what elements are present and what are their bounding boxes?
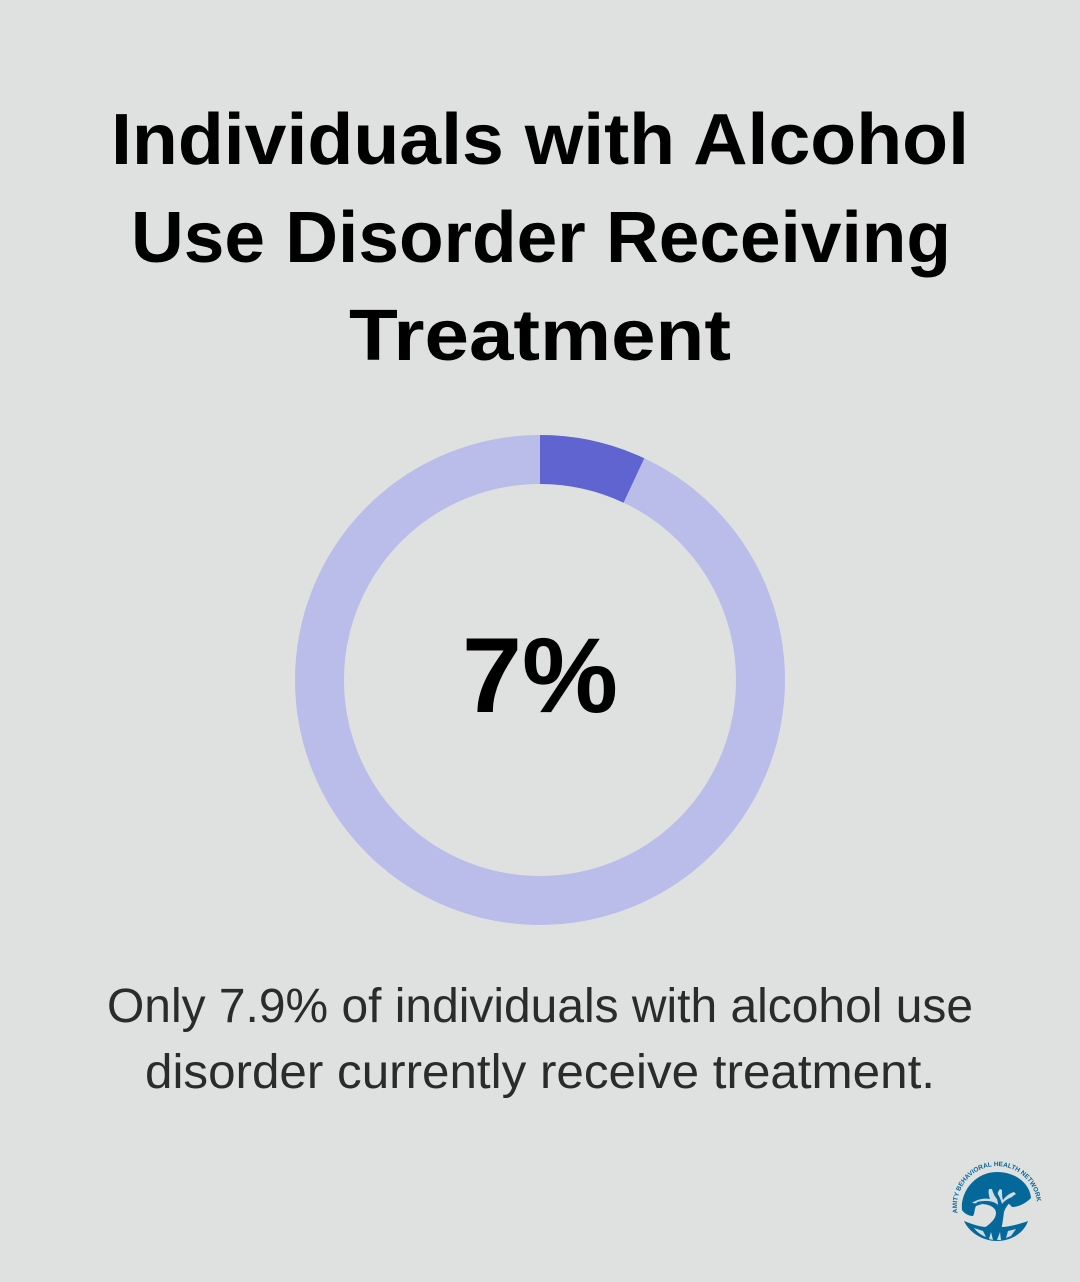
title: Individuals with Alcohol bbox=[111, 100, 969, 180]
title bbox=[111, 100, 969, 376]
donut highlighted segment bbox=[540, 435, 644, 503]
donut chart: 7 percent bbox=[320, 435, 760, 900]
title: Use Disorder Receiving bbox=[131, 198, 951, 278]
donut value: 7% bbox=[462, 615, 618, 735]
description text bbox=[107, 980, 973, 1099]
logo: Amity Behavioral Health Network bbox=[952, 1162, 1042, 1241]
logo tree trunk bbox=[976, 1190, 1017, 1231]
description text: disorder currently receive treatment. bbox=[145, 1046, 935, 1099]
logo roots bowl bbox=[964, 1221, 1028, 1241]
logo canopy branch gaps bbox=[972, 1189, 1016, 1205]
logo tree canopy bbox=[962, 1172, 1031, 1216]
logo root gaps bbox=[974, 1228, 1016, 1240]
logo circular name: AMITY BEHAVIORAL HEALTH NETWORK bbox=[952, 1162, 1042, 1213]
donut track bbox=[320, 460, 760, 900]
description text: Only 7.9% of individuals with alcohol use bbox=[107, 980, 973, 1033]
title: Treatment bbox=[349, 296, 731, 376]
